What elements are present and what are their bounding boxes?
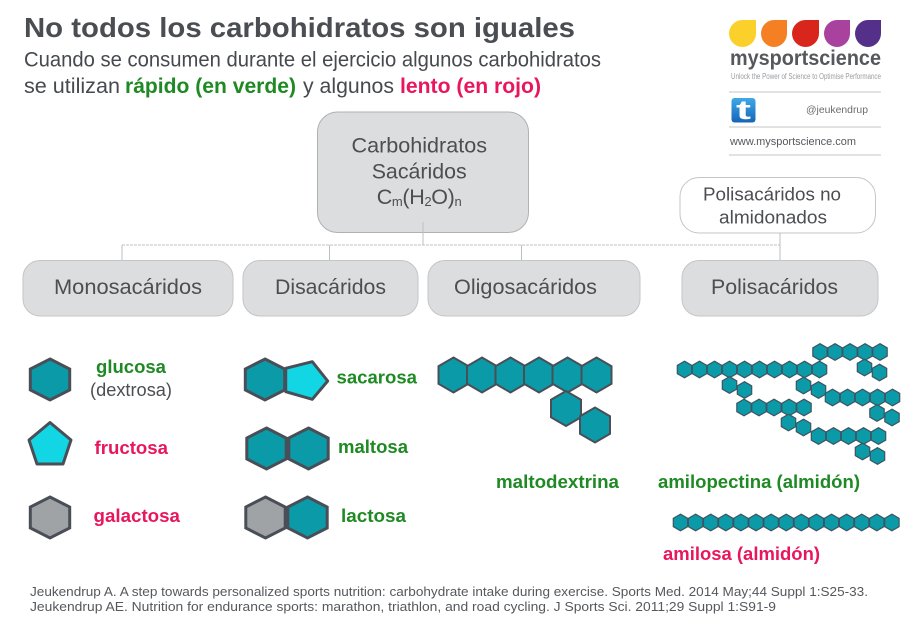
icon: amilopectina branched chain: [677, 344, 900, 464]
icon: sacarosa: [245, 359, 328, 400]
logo: mysportscience: Unlock the Power of Science to Optimise Performance: [731, 72, 881, 81]
icon: amilosa chain: [673, 514, 899, 531]
label: maltosa: maltosa: [338, 436, 409, 457]
logo: mysportscience: mysportscience: [730, 47, 881, 70]
label: maltodextrina: maltodextrina: [496, 471, 620, 492]
label: amilopectina: amilopectina (almidón): [658, 471, 860, 492]
social and website block: t: [736, 95, 751, 125]
box: Carbohidratos Sacáridos: C: [377, 185, 392, 209]
label: fructosa: fructosa: [94, 437, 169, 458]
box: Carbohidratos Sacáridos: 2: [424, 194, 432, 209]
box: Monosacáridos: Monosacáridos: [54, 275, 202, 299]
icon: lactosa: [246, 497, 327, 538]
subtitle: [24, 48, 601, 98]
social and website block: [729, 92, 881, 155]
box: Carbohidratos Sacáridos: n: [454, 194, 462, 209]
icon: maltodextrina chain: [438, 358, 612, 442]
references: Jeukendrup AE. Nutrition for endurance sports: marathon, triathlon, and road cycling. J Sports Sci. 2011;29 Suppl 1:S91-9: [30, 599, 776, 614]
social and website block: @jeukendrup: [806, 104, 868, 116]
box: Polisacáridos: Polisacáridos: [711, 275, 838, 299]
label: glucosa: (dextrosa): [90, 380, 172, 400]
title: No todos los carbohidratos son iguales: [24, 12, 575, 43]
logo: mysportscience: [729, 20, 881, 81]
icon: fructosa: [29, 422, 71, 464]
label: glucosa: glucosa: [96, 356, 167, 377]
box: Oligosacáridos: Oligosacáridos: [454, 275, 597, 299]
label: amilosa: amilosa (almidón): [663, 543, 820, 564]
box: Polisacáridos no almidonados: almidonados: [719, 208, 827, 228]
box: Carbohidratos Sacáridos: Sacáridos: [372, 159, 467, 183]
label: lactosa: lactosa: [341, 505, 407, 526]
icon: glucosa: [30, 359, 70, 400]
label: glucosa: [90, 356, 172, 400]
box: Polisacáridos: [682, 260, 878, 316]
label: galactosa: galactosa: [94, 505, 181, 526]
subtitle: Cuando se consumen durante el ejercicio algunos carbohidratos: [24, 48, 601, 72]
references: [30, 584, 868, 614]
box: Polisacáridos no almidonados: Polisacáridos no: [703, 184, 841, 204]
box: Disacáridos: Disacáridos: [275, 275, 386, 299]
box: Monosacáridos: [23, 260, 233, 316]
box: Carbohidratos Sacáridos: (H: [402, 185, 425, 209]
subtitle: lento (en rojo): [400, 75, 541, 98]
box: Carbohidratos Sacáridos: m: [392, 194, 403, 209]
box: Carbohidratos Sacáridos: Carbohidratos: [352, 134, 487, 158]
box: Carbohidratos Sacáridos: [318, 112, 528, 232]
icon: maltosa: [247, 428, 328, 469]
box: Polisacáridos no almidonados: [680, 178, 876, 233]
subtitle: se utilizan: [24, 75, 120, 98]
label: sacarosa: sacarosa: [336, 366, 418, 388]
icon: galactosa: [30, 497, 70, 538]
box: Carbohidratos Sacáridos: O): [431, 185, 455, 209]
subtitle: rápido (en verde): [125, 75, 296, 98]
box: Oligosacáridos: [428, 260, 640, 316]
social and website block: www.mysportscience.com: [729, 136, 856, 148]
subtitle: y algunos: [303, 75, 394, 98]
box: Disacáridos: [243, 260, 418, 316]
references: Jeukendrup A. A step towards personalized sports nutrition: carbohydrate intake during exercise. Sports Med. 2014 May;44 Suppl 1:S25-33.: [30, 584, 868, 599]
connector lines: [122, 222, 780, 261]
